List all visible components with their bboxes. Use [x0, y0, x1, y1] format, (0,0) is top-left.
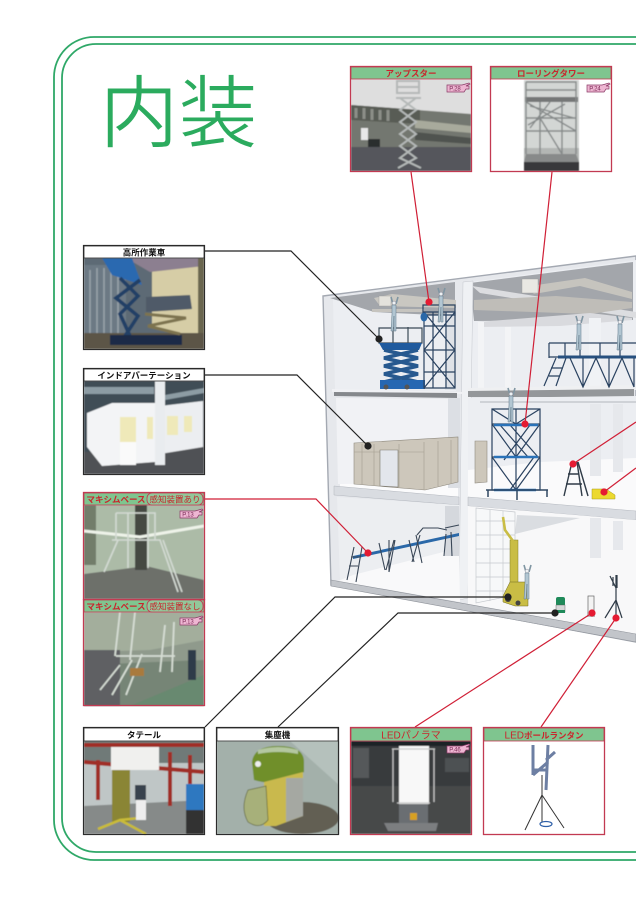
callout dots	[364, 298, 620, 622]
panel: マキシムベース 感知装置あり: P.13	[182, 512, 194, 518]
base edge of building	[331, 580, 636, 642]
building cutaway illustration	[323, 256, 636, 642]
panel: アップスター	[350, 66, 472, 172]
panel: タテール: タテール	[127, 730, 161, 740]
panel: マキシムベース 感知装置なし: マキシムベース	[86, 602, 146, 612]
panel: アップスター: P.28	[449, 86, 461, 92]
maxim base platform	[347, 525, 459, 582]
panel: LEDパノラマ: P.46	[449, 748, 461, 754]
room: lower right	[468, 506, 636, 636]
panel: ローリングタワー	[490, 66, 612, 172]
panel: LEDパノラマ: LEDパノラマ	[381, 730, 441, 742]
panel: マキシムベース 感知装置なし: 感知装置なし	[149, 602, 201, 612]
wide platform scaffold	[544, 316, 636, 387]
shutter door	[476, 508, 515, 603]
panel: アップスター: アップスター	[385, 68, 437, 78]
leader lines	[205, 172, 636, 727]
rolling tower	[486, 388, 548, 500]
panel: マキシムベース 感知装置なし	[84, 600, 204, 706]
tower scaffold (upstar) in use	[420, 288, 455, 388]
panel: インドアパーテーション	[84, 368, 204, 474]
room: lower left	[337, 497, 460, 602]
dust collector	[553, 597, 565, 613]
tatail lift with worker	[503, 517, 531, 606]
title: 内装	[100, 49, 258, 164]
centre column	[459, 281, 473, 600]
yellow box	[592, 489, 615, 499]
room: middle left	[336, 398, 460, 497]
panel: 集塵機	[216, 728, 339, 834]
stepladder	[564, 462, 588, 496]
panel: LEDポールランタン: LEDポールランタン	[505, 730, 583, 742]
LED panorama small	[587, 596, 595, 617]
panel: 高所作業車: 高所作業車	[123, 248, 166, 258]
panel: LEDポールランタン	[484, 728, 604, 834]
panel: マキシムベース 感知装置あり: 感知装置あり	[149, 494, 201, 504]
panel: インドアパーテーション: インドアパーテーション	[97, 370, 191, 380]
panel: マキシムベース 感知装置あり	[84, 492, 204, 600]
room: upper right	[470, 260, 636, 390]
floor slab: lower	[334, 486, 636, 520]
LED pole lantern small	[605, 575, 622, 618]
partition walls	[354, 437, 487, 490]
panel: マキシムベース 感知装置なし: P.13	[182, 620, 194, 626]
scissor lift	[379, 297, 425, 390]
building shell	[323, 256, 636, 642]
panel: ローリングタワー: ローリングタワー	[517, 68, 585, 78]
panel: LEDパノラマ	[350, 728, 472, 834]
room: middle right	[468, 396, 636, 512]
panel: 高所作業車	[84, 246, 204, 350]
floor slab: upper	[332, 385, 636, 398]
panel: 集塵機: 集塵機	[265, 730, 291, 740]
panel: マキシムベース 感知装置あり: マキシムベース	[86, 494, 146, 504]
panel: ローリングタワー: P.24	[589, 86, 601, 92]
panel: タテール	[84, 728, 204, 834]
room: upper left	[330, 282, 456, 391]
